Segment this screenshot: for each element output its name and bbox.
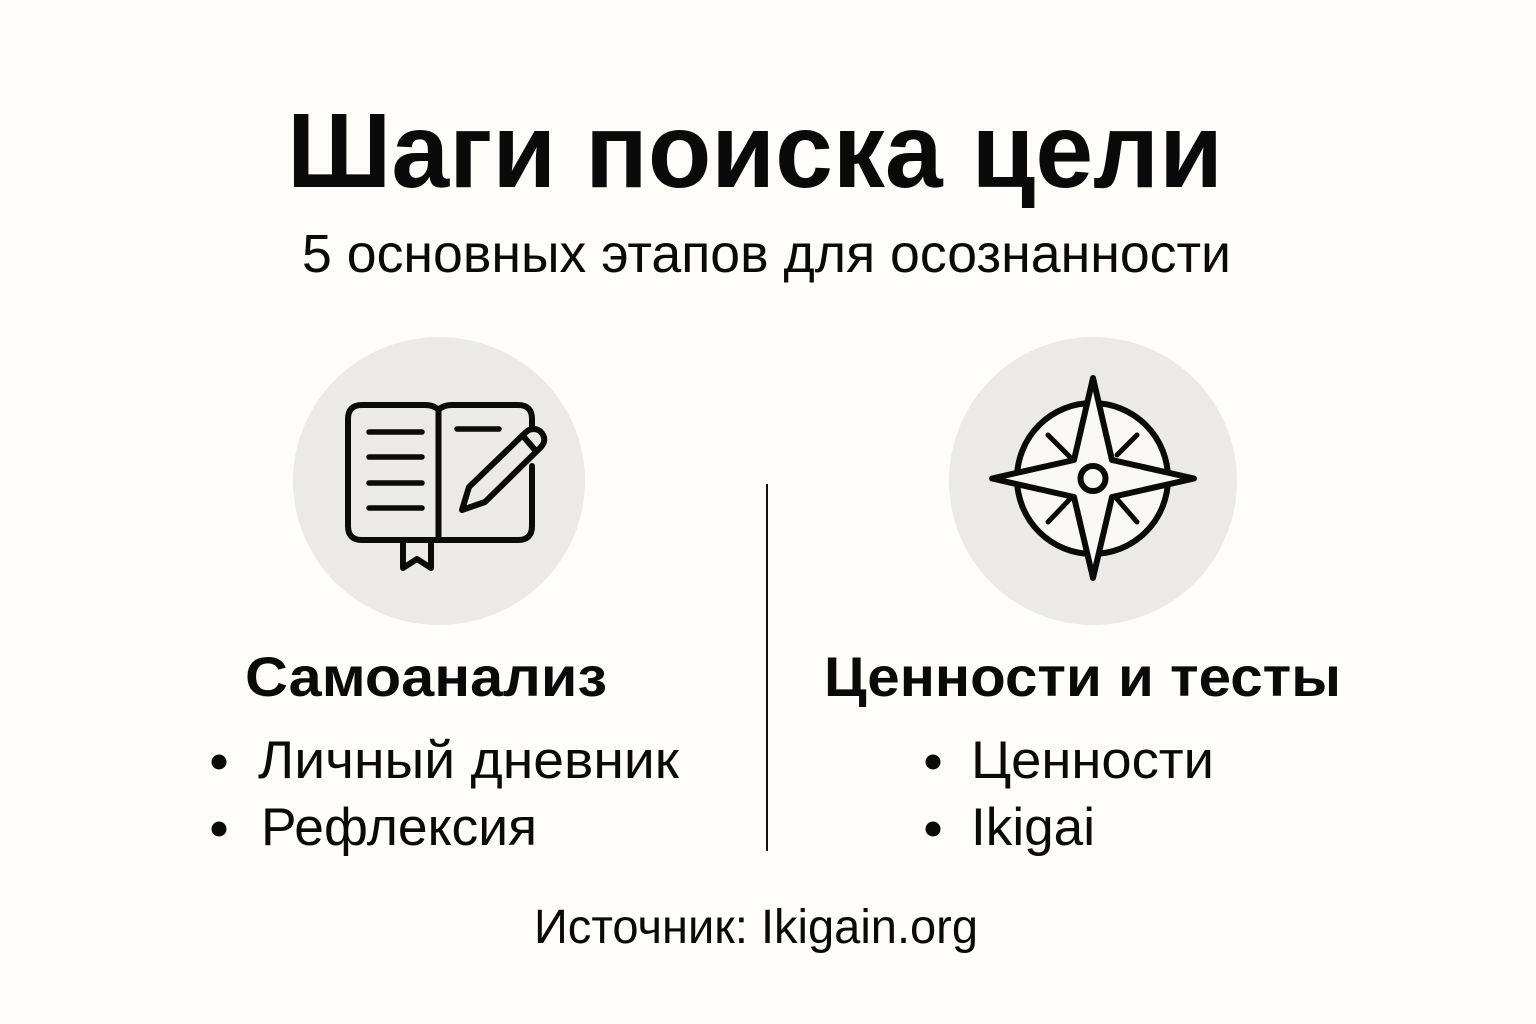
source: Источник: Ikigain.org (534, 901, 978, 954)
list: self-analysis (212, 731, 680, 857)
icon: notebook and pencil (293, 337, 585, 625)
divider (766, 484, 768, 851)
icon: compass rose (949, 337, 1237, 625)
heading: self-analysis: Самоанализ (245, 645, 607, 708)
list: self-analysis: Личный дневник (258, 731, 680, 790)
list: values and tests (926, 731, 1214, 857)
subtitle: 5 основных этапов для осознанности (302, 224, 1231, 284)
heading: values and tests: Ценности и тесты (824, 645, 1341, 708)
list: self-analysis: Рефлексия (261, 798, 537, 857)
list: values and tests: Ikigai (971, 798, 1095, 857)
list: values and tests: Ценности (971, 731, 1214, 790)
title: Шаги поиска цели (287, 92, 1223, 210)
